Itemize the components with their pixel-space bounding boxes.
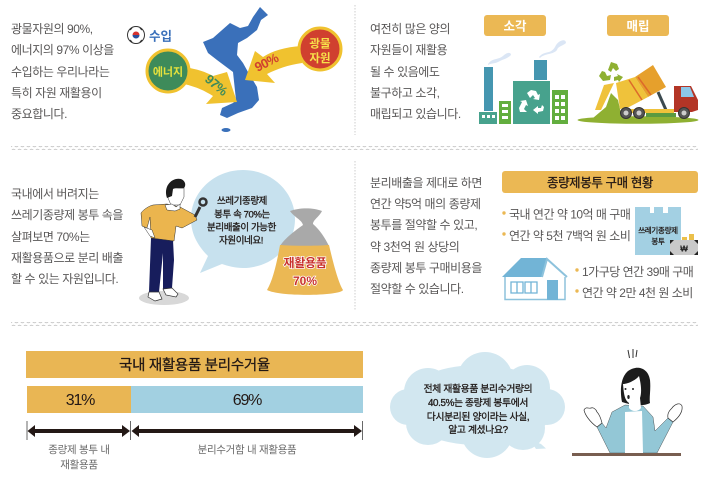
text: bag content note: 국내에서 버려지는 [11, 187, 99, 201]
badge: minerals: 광물 [309, 38, 331, 50]
callout: cloud speech bubble: 다시분리된 양이라는 사실, [427, 411, 529, 423]
text: incineration and landfill note [370, 22, 461, 121]
range arrows [27, 421, 362, 440]
arrow: minerals 90% [245, 46, 302, 83]
label: recyclables in bins: 분리수거함 내 재활용품 [198, 443, 297, 456]
text: bag content note: 쓰레기종량제 봉투 속을 [11, 208, 123, 222]
callout: cloud speech bubble: 전체 재활용품 분리수거량의 [424, 382, 532, 395]
list: household purchase: 연간 약 2만 4천 원 소비 [582, 285, 693, 300]
text: bag content note: 할 수 있는 자원입니다. [11, 272, 118, 286]
illustration: surprised woman [572, 349, 682, 456]
label: incineration: 소각 [503, 20, 527, 34]
list: household purchase: 1가구당 연간 39매 구매 [582, 265, 693, 279]
speech bubble: 자원이네요! [219, 236, 263, 246]
icon: garbage bag with money: 봉투 [651, 237, 665, 246]
arrow: energy 97% [184, 67, 237, 104]
chart title [26, 351, 363, 378]
text: bag content note: 재활용품으로 분리 배출 [11, 251, 123, 265]
icon: incinerator factory [479, 40, 568, 124]
icon: house [502, 258, 567, 300]
bar: 31% [27, 386, 131, 413]
text: incineration and landfill note: 여전히 많은 양의 [370, 22, 450, 36]
bar: 31%: 31% [66, 392, 95, 409]
heading: bag purchase status [502, 171, 698, 193]
text: savings from separating waste [370, 176, 482, 296]
list: national purchase: 국내 연간 약 10억 매 구매 [509, 206, 630, 222]
text: intro on imported resources [11, 22, 114, 121]
illustration: recycling bag: 70% [293, 274, 317, 288]
text: savings from separating waste: 분리배출을 제대로 하면 [370, 176, 482, 190]
label: incineration [484, 15, 546, 36]
text: intro on imported resources: 에너지의 97% 이상을 [11, 43, 114, 57]
label: landfill [607, 15, 669, 36]
speech bubble: 봉투 속 70%는 [214, 210, 270, 220]
arrow: minerals 90%: 90% [252, 50, 282, 75]
bar: 69%: 69% [233, 392, 262, 409]
text: savings from separating waste: 종량제 봉투 구매비용을 [370, 261, 482, 275]
text: bag content note: 살펴보면 70%는 [11, 230, 90, 244]
label: import: 수입 [149, 30, 172, 44]
text: savings from separating waste: 약 3천억 원 상당의 [370, 239, 459, 254]
list: national purchase [502, 206, 630, 243]
Korean peninsula [203, 7, 268, 118]
illustration: recycling bag: 재활용품 [284, 255, 327, 270]
text: intro on imported resources: 특히 자원 재활용이 [11, 86, 102, 100]
text: intro on imported resources: 수입하는 우리나라는 [11, 65, 110, 79]
callout: cloud speech bubble [390, 352, 565, 458]
text: incineration and landfill note: 매립되고 있습니다. [370, 107, 461, 121]
label: landfill: 매립 [626, 18, 650, 34]
badge: minerals [299, 28, 341, 70]
speech bubble [191, 170, 295, 273]
label: recyclables in bags: 종량제 봉투 내 [48, 444, 110, 456]
text: incineration and landfill note: 불구하고 소각, [370, 86, 440, 100]
text: savings from separating waste: 연간 약5억 매의 종량제 [370, 196, 481, 211]
chart: separate collection rate [26, 351, 363, 471]
icon: garbage bag with money [635, 207, 698, 255]
text: incineration and landfill note: 될 수 있음에도 [370, 65, 440, 79]
heading: bag purchase status: 종량제봉투 구매 현황 [547, 176, 654, 190]
arrow: energy 97%: 97% [202, 71, 231, 99]
label: recyclables in bags: 재활용품 [60, 458, 98, 471]
callout: cloud speech bubble: 40.5%는 종량제 봉투에서 [428, 397, 528, 409]
icon: dump truck [578, 62, 698, 124]
icon: garbage bag with money: ₩ [680, 244, 688, 254]
speech bubble: 분리배출이 가능한 [207, 222, 277, 234]
bar: 69% [131, 386, 363, 413]
text: savings from separating waste: 봉투를 절약할 수 있고, [370, 217, 477, 232]
illustration: man with magnifier [139, 179, 206, 305]
text: incineration and landfill note: 자원들이 재활용 [370, 43, 448, 57]
text: bag content note [11, 187, 123, 286]
illustration: recycling bag [267, 208, 343, 295]
chart title: 국내 재활용품 분리수거율 [119, 357, 270, 374]
badge: minerals: 자원 [309, 51, 331, 65]
text: intro on imported resources: 중요합니다. [11, 107, 67, 121]
icon: Korean flag [128, 26, 144, 44]
badge: energy: 에너지 [153, 66, 183, 78]
callout: cloud speech bubble: 알고 계셨나요? [448, 424, 509, 436]
list: national purchase: 연간 약 5천 7백억 원 소비 [509, 228, 630, 243]
speech bubble: 쓰레기종량제 [217, 195, 267, 207]
badge: energy [147, 50, 189, 92]
text: savings from separating waste: 절약할 수 있습니다. [370, 281, 464, 296]
map: imports to Korea [128, 7, 341, 132]
list: household purchase [575, 265, 693, 300]
text: intro on imported resources: 광물자원의 90%, [11, 22, 93, 36]
icon: garbage bag with money: 쓰레기종량제 [638, 226, 678, 235]
